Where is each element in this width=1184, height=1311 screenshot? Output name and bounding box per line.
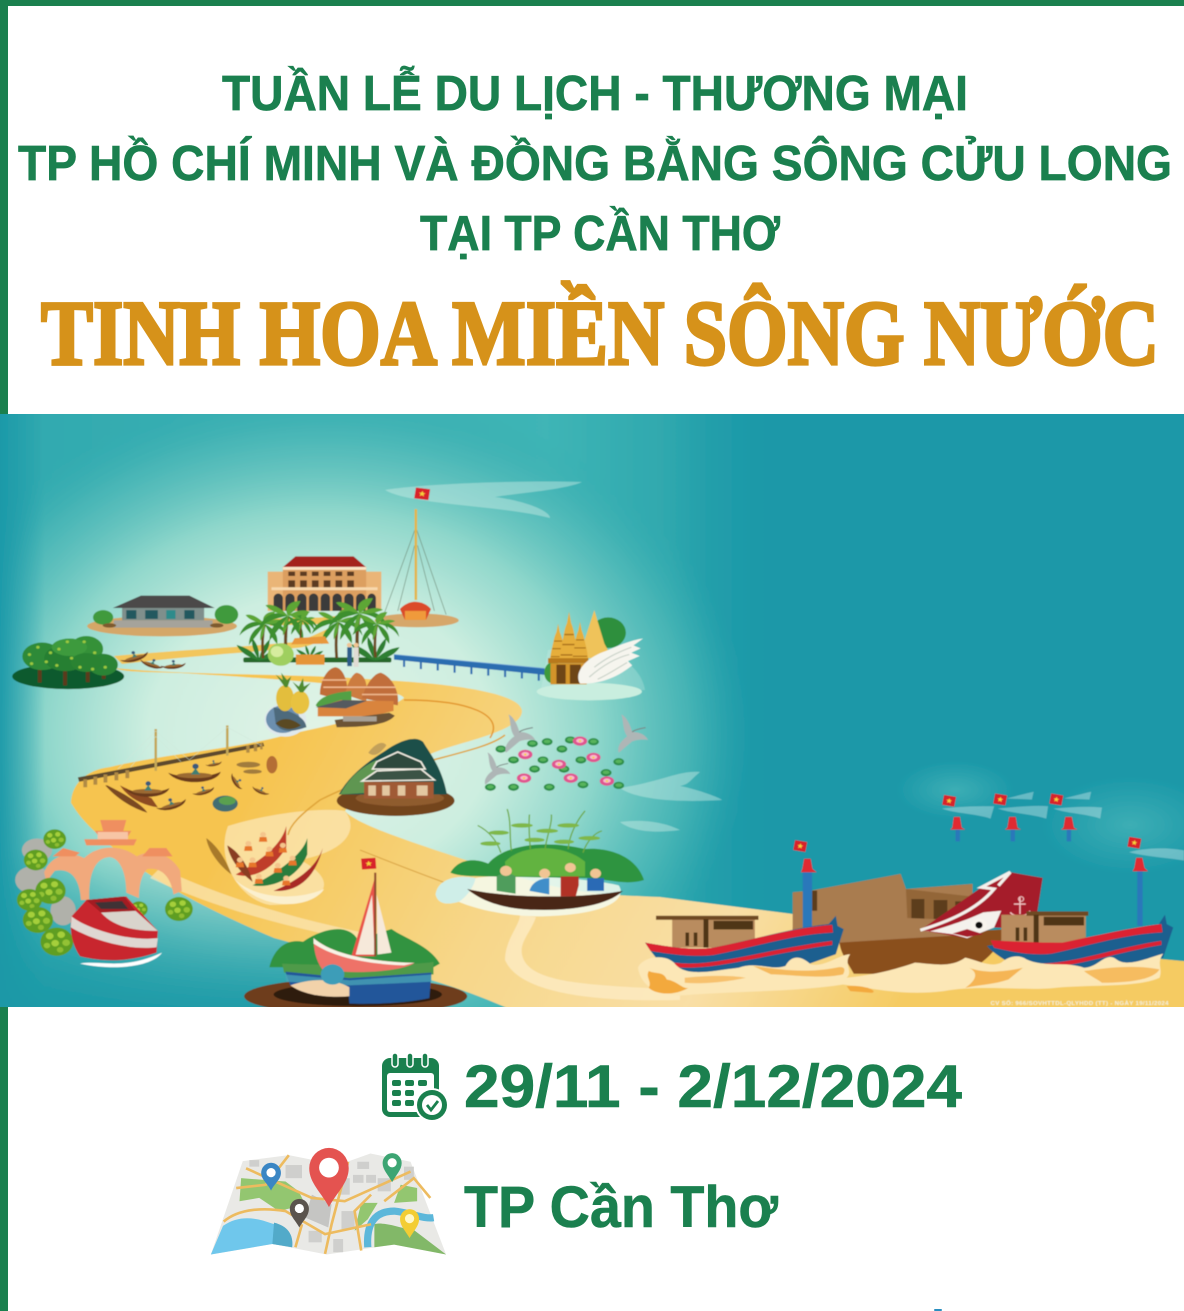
approval caption: CV SỐ: 966/SOVHTTDL-QLYHDD (TT) - NGÀY 19/11/2024 (990, 1000, 1169, 1007)
ancient house island (87, 596, 238, 636)
pink gate arch with rocks and bushes (15, 820, 193, 956)
location row (211, 1148, 779, 1255)
left green border (0, 0, 8, 1311)
central wooden boat (793, 872, 1043, 974)
date row (382, 1053, 963, 1122)
fishing boats and foam, zoom-space coordinates (638, 792, 1184, 1007)
red yacht (71, 896, 162, 967)
palm garden with coconut and stall (237, 598, 400, 667)
Khmer pagoda and swan wing (537, 610, 643, 700)
scene objects in zoom-space coordinates (12, 488, 648, 1014)
don ca tai tu music boat and bamboo (436, 809, 644, 916)
title block: TUẦN LỄ DU LỊCH - THƯƠNG MẠI (222, 67, 968, 121)
top green border (0, 0, 1184, 6)
sailboat island (244, 858, 467, 1014)
title block: TẠI TP CẦN THƠ (420, 207, 780, 261)
distant moored boats with flags (942, 792, 1184, 860)
illustration panel: Mekong delta map scene (0, 400, 1184, 1025)
small rowing boats (120, 650, 186, 670)
date text: 29/11 - 2/12/2024 (464, 1053, 963, 1120)
lotus pond with cranes (485, 715, 648, 791)
mango orchard island (12, 636, 124, 689)
sandy foam waves (638, 954, 1163, 995)
pin: blue (261, 1163, 281, 1191)
icon: folded map with pins (211, 1148, 446, 1255)
pin: red (309, 1148, 349, 1207)
pale inner sand channels (224, 810, 351, 905)
pin: green (383, 1153, 402, 1182)
cut-off element at bottom edge (934, 1309, 942, 1311)
right fishing boat (987, 837, 1173, 971)
floating market with cable bridge (78, 725, 277, 813)
icon: calendar with check (382, 1053, 449, 1122)
Vietnamese flag tower (375, 488, 459, 627)
sea background (0, 400, 1184, 1025)
winding sand river banks (71, 616, 1184, 1025)
pineapples and fish plate (264, 673, 311, 737)
clouds and wisps (385, 481, 722, 832)
dragon boat race (206, 826, 324, 904)
brick kilns and boat (316, 667, 398, 727)
pin: yellow (400, 1209, 419, 1238)
left fishing boat (645, 840, 844, 975)
mountain pagoda (337, 739, 455, 816)
location text: TP Cần Thơ (464, 1175, 779, 1240)
pin: dark grey (290, 1199, 309, 1228)
blue bridge (394, 655, 545, 681)
title block (18, 67, 1172, 261)
Independence Palace building (268, 556, 381, 611)
